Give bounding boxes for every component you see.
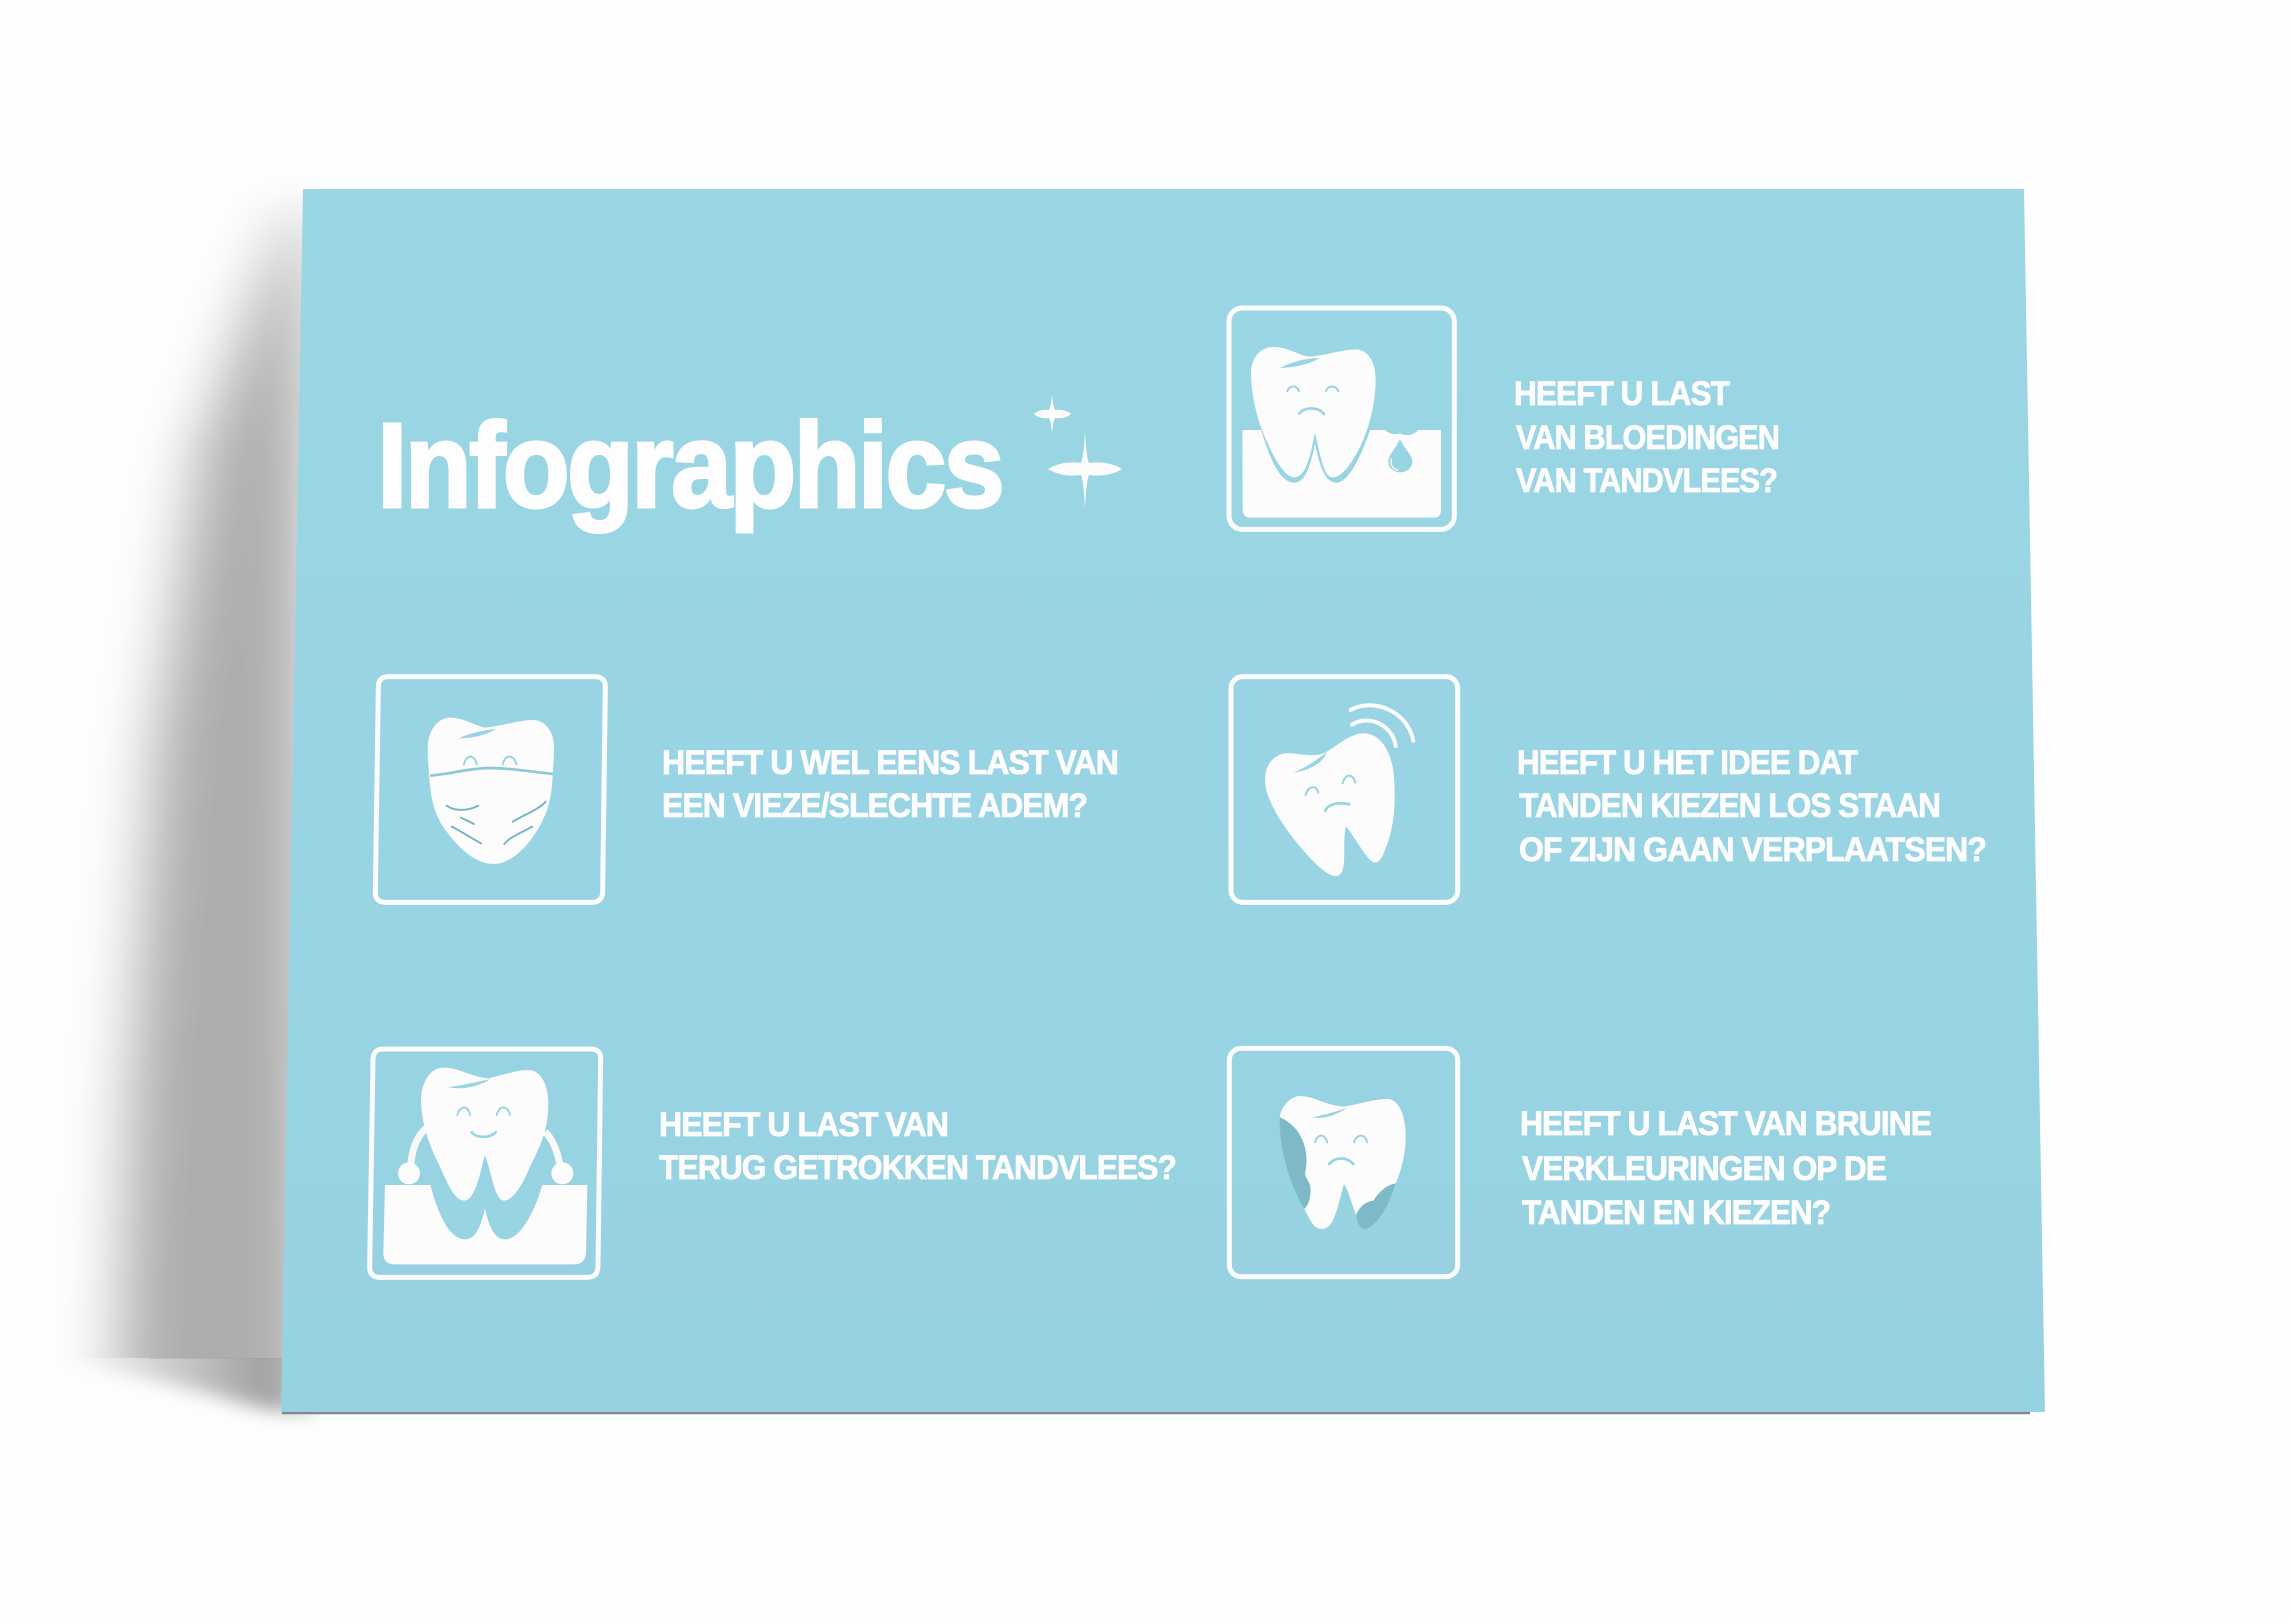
floor shadow xyxy=(88,1358,320,1422)
text: discolouration question: TANDEN EN KIEZEN? xyxy=(1522,1194,1830,1232)
text: bad breath question: EEN VIEZE/SLECHTE ADEM? xyxy=(662,787,1087,825)
icon: wobbling tooth xyxy=(1231,677,1458,902)
text: bad breath question xyxy=(662,744,1118,825)
sparkles xyxy=(1034,395,1122,508)
text: receding gums question xyxy=(659,1106,1176,1187)
text: bleeding gums question: VAN TANDVLEES? xyxy=(1516,462,1777,500)
panel: receding gums xyxy=(370,1049,1176,1277)
panel: bleeding gums xyxy=(1229,308,1779,529)
poster card xyxy=(281,189,2045,1412)
wall shadow xyxy=(118,185,310,1400)
panel: loose teeth xyxy=(1231,677,1986,902)
text: bleeding gums question: HEEFT U LAST xyxy=(1514,375,1730,413)
text: receding gums question: TERUG GETROKKEN TANDVLEES? xyxy=(659,1149,1176,1187)
text: loose teeth question: OF ZIJN GAAN VERPLAATSEN? xyxy=(1519,831,1986,869)
text: bleeding gums question xyxy=(1514,375,1779,500)
icon: tooth with receding gum xyxy=(370,1049,601,1277)
text: discolouration question: VERKLEURINGEN OP DE xyxy=(1522,1150,1886,1188)
text: receding gums question: HEEFT U LAST VAN xyxy=(659,1106,948,1144)
title: Infographics xyxy=(377,397,1002,533)
icon: stained tooth xyxy=(1229,1048,1458,1277)
icon: tooth with bleeding gum xyxy=(1229,308,1454,529)
text: loose teeth question: TANDEN KIEZEN LOS STAAN xyxy=(1519,787,1940,825)
text: loose teeth question xyxy=(1517,744,1986,869)
text: loose teeth question: HEEFT U HET IDEE DAT xyxy=(1517,744,1858,782)
text: discolouration question xyxy=(1520,1105,1931,1232)
text: bleeding gums question: VAN BLOEDINGEN xyxy=(1516,419,1779,457)
panel: bad breath xyxy=(375,677,1118,902)
text: bad breath question: HEEFT U WEL EENS LAST VAN xyxy=(662,744,1118,782)
card edge shadow xyxy=(282,1412,2030,1414)
floor line xyxy=(150,1358,282,1360)
text: discolouration question: HEEFT U LAST VAN BRUINE xyxy=(1520,1105,1931,1143)
infographic poster xyxy=(81,189,2045,1422)
icon: tooth with face mask xyxy=(375,677,605,902)
panel: brown discolouration xyxy=(1229,1048,1931,1277)
